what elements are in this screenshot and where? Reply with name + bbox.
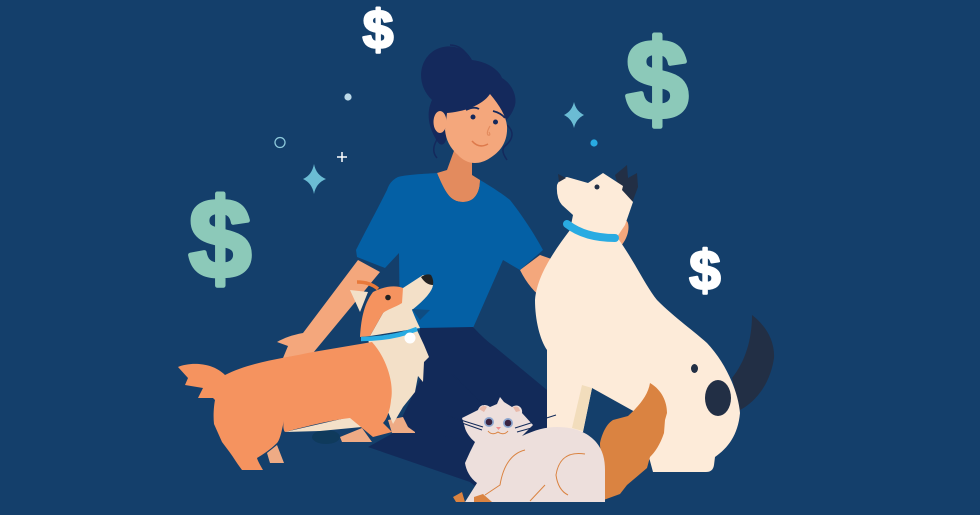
ear [350, 290, 368, 312]
inner leg shade [572, 385, 592, 431]
chest fur [368, 330, 429, 424]
icon: white dollar sign right: $ [689, 238, 721, 302]
woman [277, 45, 629, 490]
dog ears [615, 165, 638, 203]
cat [440, 374, 605, 502]
icon: sparkles and dots [275, 93, 598, 194]
orange face mask [360, 286, 403, 337]
face [445, 94, 507, 163]
ear [434, 111, 446, 133]
cat ears [479, 406, 520, 412]
facial features [466, 108, 505, 146]
left arm and hand [277, 260, 380, 358]
icon: large green dollar sign left: $ [189, 176, 251, 301]
fluffy orange tail [598, 383, 667, 502]
collar tag [404, 332, 416, 344]
spots [691, 364, 731, 416]
shadow paw [312, 430, 340, 444]
dog collar [567, 224, 615, 238]
hair strands [434, 45, 512, 160]
far legs [267, 417, 415, 463]
whiskers [440, 374, 556, 441]
dog body and head [535, 173, 740, 472]
corgi [178, 274, 433, 470]
hair [421, 46, 516, 145]
belly [285, 417, 362, 432]
collar [361, 329, 417, 339]
icon: large green dollar sign right: $ [626, 17, 688, 142]
cat fur lines [485, 450, 585, 501]
cat body [462, 397, 605, 502]
dog tail [732, 315, 774, 410]
cat paws [453, 492, 492, 502]
white dog [535, 165, 774, 472]
nose, eye, mouth [385, 274, 433, 320]
icon: white dollar sign top: $ [363, 0, 393, 60]
neck [437, 148, 480, 202]
cat eyes and nose [484, 417, 513, 434]
body and tail [178, 342, 392, 470]
head [370, 275, 433, 336]
right arm and hand [520, 220, 629, 300]
shirt [356, 173, 543, 330]
pants [368, 327, 547, 490]
nose and eye [558, 174, 600, 190]
